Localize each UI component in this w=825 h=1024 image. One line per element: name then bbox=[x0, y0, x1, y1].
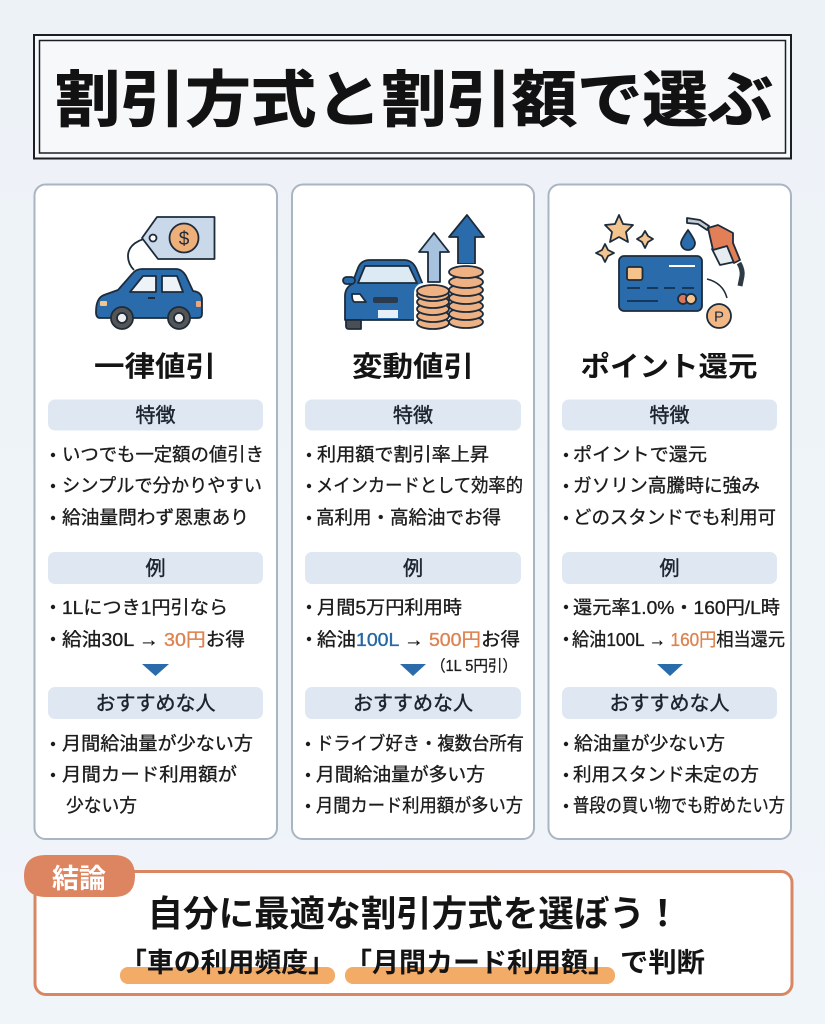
panel: 一律値引 bbox=[34, 184, 277, 839]
icon: car with coins and arrows bbox=[343, 215, 486, 331]
conclusion subtext: 「車の利用頻度」 bbox=[120, 948, 335, 978]
feature list: いつでも一定額の値引き bbox=[62, 444, 264, 465]
label: 特徴 bbox=[562, 400, 777, 430]
feature list: 給油量問わず恩恵あり bbox=[62, 507, 249, 528]
feature list: どのスタンドでも利用可 bbox=[573, 507, 776, 528]
feature list bbox=[564, 444, 776, 528]
label: 例: 例 bbox=[660, 557, 680, 580]
panel heading: 変動値引 bbox=[352, 351, 474, 382]
recommended list: ドライブ好き・複数台所有 bbox=[316, 733, 524, 754]
feature list bbox=[51, 444, 264, 528]
label: おすすめな人: おすすめな人 bbox=[610, 693, 730, 715]
conclusion heading: 自分に最適な割引方式を選ぼう！ bbox=[148, 893, 680, 934]
label: おすすめな人 bbox=[305, 687, 521, 719]
panel heading: 一律値引 bbox=[94, 351, 216, 382]
recommended list: 月間カード利用額が多い方 bbox=[316, 795, 523, 816]
panel: conclusion bbox=[24, 855, 792, 994]
title bbox=[34, 35, 791, 158]
arrow bbox=[400, 664, 426, 676]
conclusion subtext: で判断 bbox=[620, 948, 705, 978]
feature list: ポイントで還元 bbox=[573, 444, 707, 465]
example: 1Lにつき1円引なら bbox=[62, 597, 228, 618]
recommended list bbox=[564, 733, 785, 816]
example bbox=[51, 597, 245, 650]
label: 例: 例 bbox=[146, 557, 166, 580]
icon: car with price tag: $ bbox=[179, 229, 190, 250]
arrow bbox=[657, 664, 683, 676]
label: 特徴 bbox=[305, 400, 521, 430]
panel: ポイント還元 bbox=[548, 184, 791, 839]
label: 例 bbox=[48, 552, 263, 584]
feature list: 高利用・高給油でお得 bbox=[316, 507, 501, 528]
example: 月間5万円利用時 bbox=[317, 597, 462, 618]
label: 特徴: 特徴 bbox=[393, 404, 433, 427]
arrow bbox=[142, 664, 169, 676]
conclusion subtext bbox=[120, 948, 705, 978]
recommended list bbox=[51, 733, 253, 816]
label: おすすめな人: おすすめな人 bbox=[353, 693, 473, 715]
tag: 結論 bbox=[24, 855, 135, 897]
icon: credit card, stars and fuel nozzle bbox=[596, 215, 742, 328]
recommended list: 月間給油量が多い方 bbox=[316, 764, 485, 785]
feature list: 利用額で割引率上昇 bbox=[317, 444, 489, 465]
panel: 変動値引 bbox=[292, 184, 534, 839]
highlight marks bbox=[120, 967, 615, 984]
title: 割引方式と割引額で選ぶ bbox=[55, 66, 773, 134]
feature list: ガソリン高騰時に強み bbox=[573, 475, 760, 496]
icon: credit card, stars and fuel nozzle: P bbox=[714, 308, 724, 326]
example: 還元率1.0%・160円/L時 bbox=[573, 597, 780, 618]
recommended list: 月間カード利用額が bbox=[62, 764, 237, 785]
label: 特徴: 特徴 bbox=[136, 404, 176, 427]
panel heading: ポイント還元 bbox=[580, 351, 758, 382]
recommended list: 利用スタンド未定の方 bbox=[573, 764, 759, 785]
example: （1L 5円引） bbox=[431, 657, 517, 675]
recommended list bbox=[306, 733, 524, 816]
example bbox=[307, 597, 520, 675]
feature list bbox=[307, 444, 523, 528]
recommended list: 少ない方 bbox=[66, 795, 137, 816]
feature list: メインカードとして効率的 bbox=[316, 475, 523, 496]
feature list: シンプルで分かりやすい bbox=[62, 475, 262, 496]
label: おすすめな人 bbox=[562, 687, 777, 719]
tag: 結論: 結論 bbox=[52, 864, 106, 894]
recommended list: 普段の買い物でも貯めたい方 bbox=[573, 795, 785, 816]
example bbox=[564, 597, 785, 650]
recommended list: 給油量が少ない方 bbox=[574, 733, 725, 754]
example: 給油30L → 30円お得 bbox=[62, 629, 245, 650]
label: 例: 例 bbox=[403, 557, 423, 580]
label: 例 bbox=[305, 552, 521, 584]
example: 給油100L → 160円相当還元 bbox=[572, 629, 785, 650]
label: おすすめな人 bbox=[48, 687, 263, 719]
label: 特徴: 特徴 bbox=[650, 404, 690, 427]
label: 特徴 bbox=[48, 400, 263, 430]
conclusion subtext: 「月間カード利用額」 bbox=[345, 948, 615, 978]
recommended list: 月間給油量が少ない方 bbox=[62, 733, 253, 754]
icon: car with price tag bbox=[96, 217, 214, 329]
label: 例 bbox=[562, 552, 777, 584]
label: おすすめな人: おすすめな人 bbox=[96, 693, 216, 715]
example: 給油100L → 500円お得 bbox=[317, 629, 520, 650]
